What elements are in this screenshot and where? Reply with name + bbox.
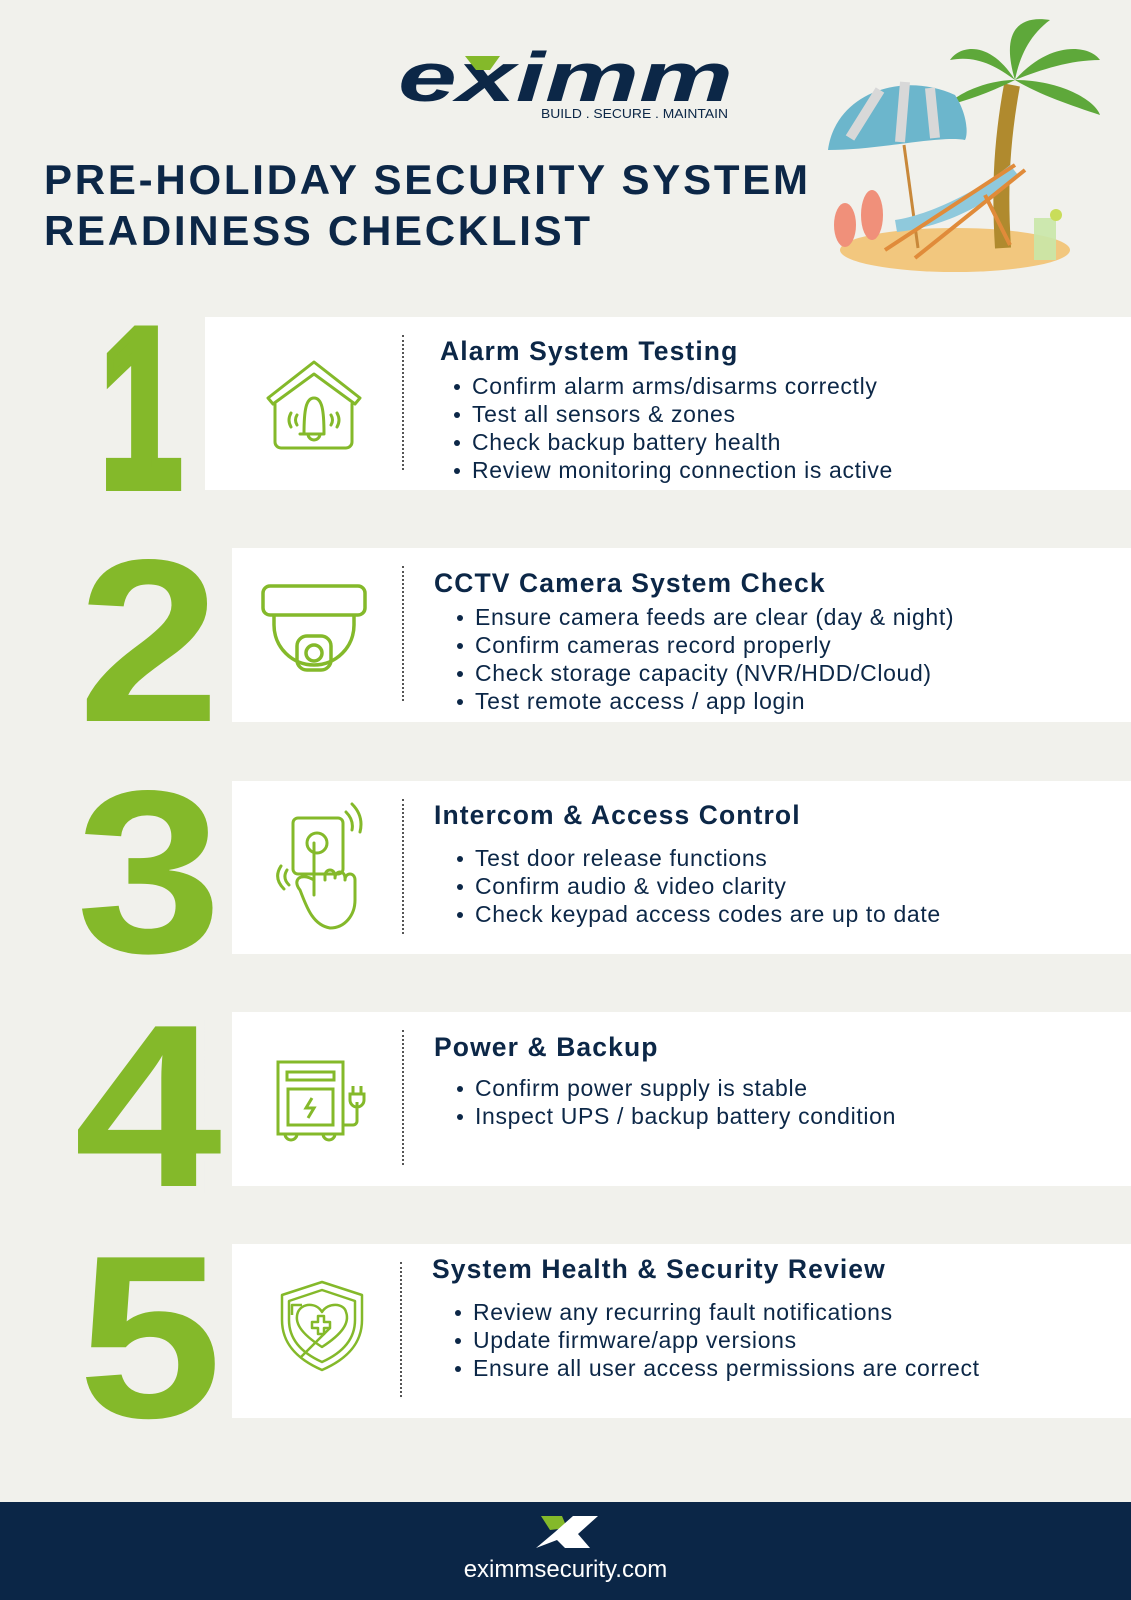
bullets 5: Ensure all user access permissions are correct (473, 1355, 980, 1381)
bullets 2: Ensure camera feeds are clear (day & night) (475, 604, 954, 630)
bullets 4: Confirm power supply is stable (475, 1075, 808, 1101)
footer (0, 1502, 1131, 1600)
bullets 4: Inspect UPS / backup battery condition (475, 1103, 896, 1129)
bullets 3: Check keypad access codes are up to date (475, 901, 941, 927)
bullets 1 (454, 373, 893, 483)
bullets 2 (457, 604, 954, 714)
footer url: eximmsecurity.com (464, 1556, 667, 1583)
panel 2: cctv (232, 548, 1131, 722)
logo (398, 38, 733, 121)
panel 5: system health (232, 1244, 1131, 1418)
number 2: 2 (78, 512, 220, 771)
title: PRE-HOLIDAY SECURITY SYSTEM (44, 156, 808, 203)
icon: house bell (268, 362, 360, 448)
heading 3: Intercom & Access Control (434, 800, 801, 830)
number 4: 4 (74, 977, 222, 1236)
bullets 2: Test remote access / app login (475, 688, 805, 714)
icon: intercom touch (278, 804, 361, 928)
heading 1: Alarm System Testing (440, 336, 738, 366)
number 3: 3 (76, 743, 222, 1002)
heading 4: Power & Backup (434, 1032, 659, 1062)
logo: BUILD . SECURE . MAINTAIN (541, 106, 728, 121)
number 1: 1 (100, 281, 182, 534)
bullets 3: Confirm audio & video clarity (475, 873, 787, 899)
bullets 1: Confirm alarm arms/disarms correctly (472, 373, 878, 399)
bullets 3: Test door release functions (475, 845, 767, 871)
icon: power backup (278, 1062, 364, 1140)
panel 3: intercom (232, 781, 1131, 954)
bullets 1: Test all sensors & zones (472, 401, 736, 427)
bullets 2: Check storage capacity (NVR/HDD/Cloud) (475, 660, 932, 686)
bullets 1: Check backup battery health (472, 429, 781, 455)
panel 4: power (232, 1012, 1131, 1186)
icon: dome camera (263, 586, 365, 670)
logo: eximm (398, 38, 733, 116)
bullets 2: Confirm cameras record properly (475, 632, 831, 658)
footer logo mark (536, 1516, 598, 1548)
bullets 5 (455, 1299, 980, 1381)
panel 1: alarm system testing (205, 317, 1131, 490)
heading 5: System Health & Security Review (432, 1254, 886, 1284)
bullets 5: Update firmware/app versions (473, 1327, 797, 1353)
title (44, 156, 808, 254)
bullets 5: Review any recurring fault notifications (473, 1299, 893, 1325)
bullets 4 (457, 1075, 896, 1129)
illustration: beach (828, 19, 1100, 272)
bullets 1: Review monitoring connection is active (472, 457, 893, 483)
heading 2: CCTV Camera System Check (434, 568, 826, 598)
bullets 3 (457, 845, 941, 927)
title: READINESS CHECKLIST (44, 207, 590, 254)
icon: shield heart (282, 1282, 362, 1370)
number 5: 5 (78, 1208, 222, 1467)
